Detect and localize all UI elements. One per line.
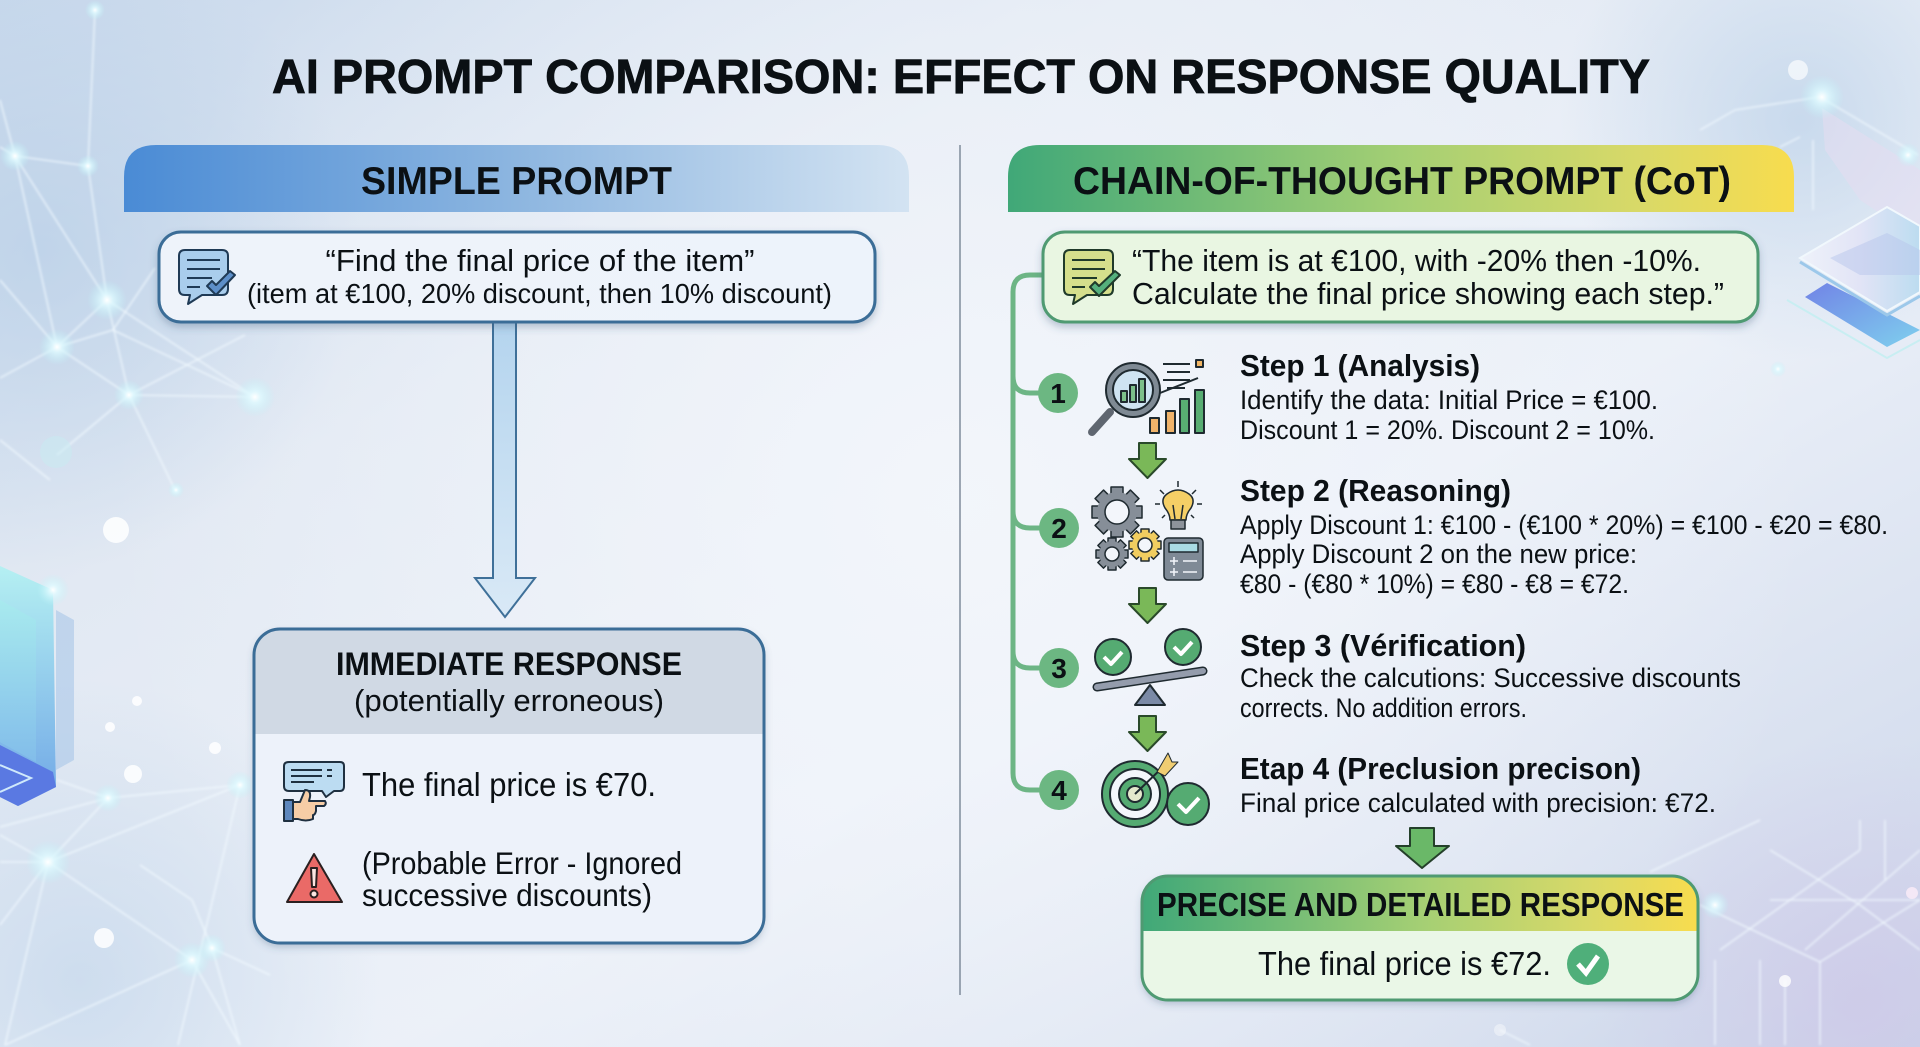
arrow: prompt to response (475, 320, 535, 617)
step 2 text: €80 - (€80 * 10%) = €80 - €8 = €72. (1240, 569, 1629, 599)
step 2 text: Step 2 (Reasoning) (1240, 473, 1511, 508)
step 3 text: Step 3 (Vérification) (1240, 628, 1526, 663)
badge 1 (1038, 373, 1078, 413)
icon: warning triangle (287, 854, 342, 902)
panel: precise and detailed response: The final price is €72. (1258, 945, 1551, 982)
panel: precise and detailed response: PRECISE AND DETAILED RESPONSE (1157, 886, 1684, 923)
background shape: right isometric planes (1787, 108, 1920, 358)
step 4 text (1240, 751, 1716, 818)
step 4 text: Final price calculated with precision: €72. (1240, 788, 1716, 818)
divider (959, 145, 961, 995)
arrow: step 2 to step 3 (1129, 588, 1166, 623)
prompt box (159, 232, 875, 322)
badge 2: 2 (1051, 513, 1067, 544)
panel: immediate response: (potentially erroneous) (354, 683, 664, 718)
step 3 (1039, 628, 1741, 723)
panel: immediate response: successive discounts) (362, 877, 652, 913)
prompt box (1043, 232, 1758, 322)
step 2 text: Apply Discount 2 on the new price: (1240, 539, 1637, 569)
step 1 text: Step 1 (Analysis) (1240, 348, 1480, 383)
icon: prompt document with check (179, 250, 235, 304)
badge 3 (1039, 648, 1079, 688)
heading: simple prompt (124, 145, 909, 212)
panel: simple prompt (124, 145, 909, 943)
icon: prompt document with check (1064, 250, 1120, 304)
arrow: step 3 to step 4 (1129, 716, 1166, 751)
badge 2 (1039, 508, 1079, 548)
background shape: left glass panels (0, 566, 74, 806)
panel: immediate response: (Probable Error - Ignored (362, 845, 682, 881)
step 1 text: Discount 1 = 20%. Discount 2 = 10%. (1240, 415, 1655, 445)
panel: immediate response (254, 629, 764, 943)
badge 4 (1039, 770, 1079, 810)
panel: immediate response: IMMEDIATE RESPONSE (336, 646, 682, 682)
panel: immediate response: The final price is €70. (362, 766, 656, 803)
badge 3: 3 (1051, 653, 1067, 684)
icon: balance with checks (1095, 629, 1203, 705)
arrow: step 1 to step 2 (1129, 443, 1166, 478)
icon: target with check (1102, 753, 1209, 827)
heading: chain-of-thought prompt (1008, 145, 1794, 212)
step 3 text: Check the calcutions: Successive discounts (1240, 663, 1741, 693)
prompt box: Calculate the final price showing each step.” (1132, 276, 1724, 311)
icon: speech bubble with pointing hand (284, 762, 344, 821)
step 1 text (1240, 348, 1658, 445)
prompt box: “The item is at €100, with -20% then -10%. (1132, 243, 1701, 278)
icon: check badge (1567, 943, 1609, 985)
step 1 (1038, 348, 1658, 445)
step 1 text: Identify the data: Initial Price = €100. (1240, 385, 1658, 415)
step 4 (1039, 751, 1716, 827)
icon: magnifier and chart (1092, 360, 1204, 433)
step 2 (1039, 473, 1888, 599)
badge 1: 1 (1050, 378, 1066, 409)
arrow: steps to final response (1396, 828, 1449, 868)
heading: simple prompt: SIMPLE PROMPT (361, 160, 672, 203)
step 2 text (1240, 473, 1888, 599)
title: AI PROMPT COMPARISON: EFFECT ON RESPONSE QUALITY (272, 51, 1650, 104)
step 4 text: Etap 4 (Preclusion precison) (1240, 751, 1641, 786)
panel: chain-of-thought prompt (1008, 145, 1888, 1000)
prompt box: “Find the final price of the item” (326, 243, 754, 278)
prompt box: (item at €100, 20% discount, then 10% discount) (247, 278, 832, 309)
icon: gears, lightbulb, calculator (1092, 481, 1203, 580)
connector: step timeline (1013, 275, 1045, 790)
badge 4: 4 (1051, 775, 1067, 806)
step 3 text (1240, 628, 1741, 723)
heading: chain-of-thought prompt: CHAIN-OF-THOUGHT PROMPT (CoT) (1073, 160, 1731, 203)
panel: precise and detailed response (1142, 876, 1698, 1000)
step 3 text: corrects. No addition errors. (1240, 693, 1527, 723)
